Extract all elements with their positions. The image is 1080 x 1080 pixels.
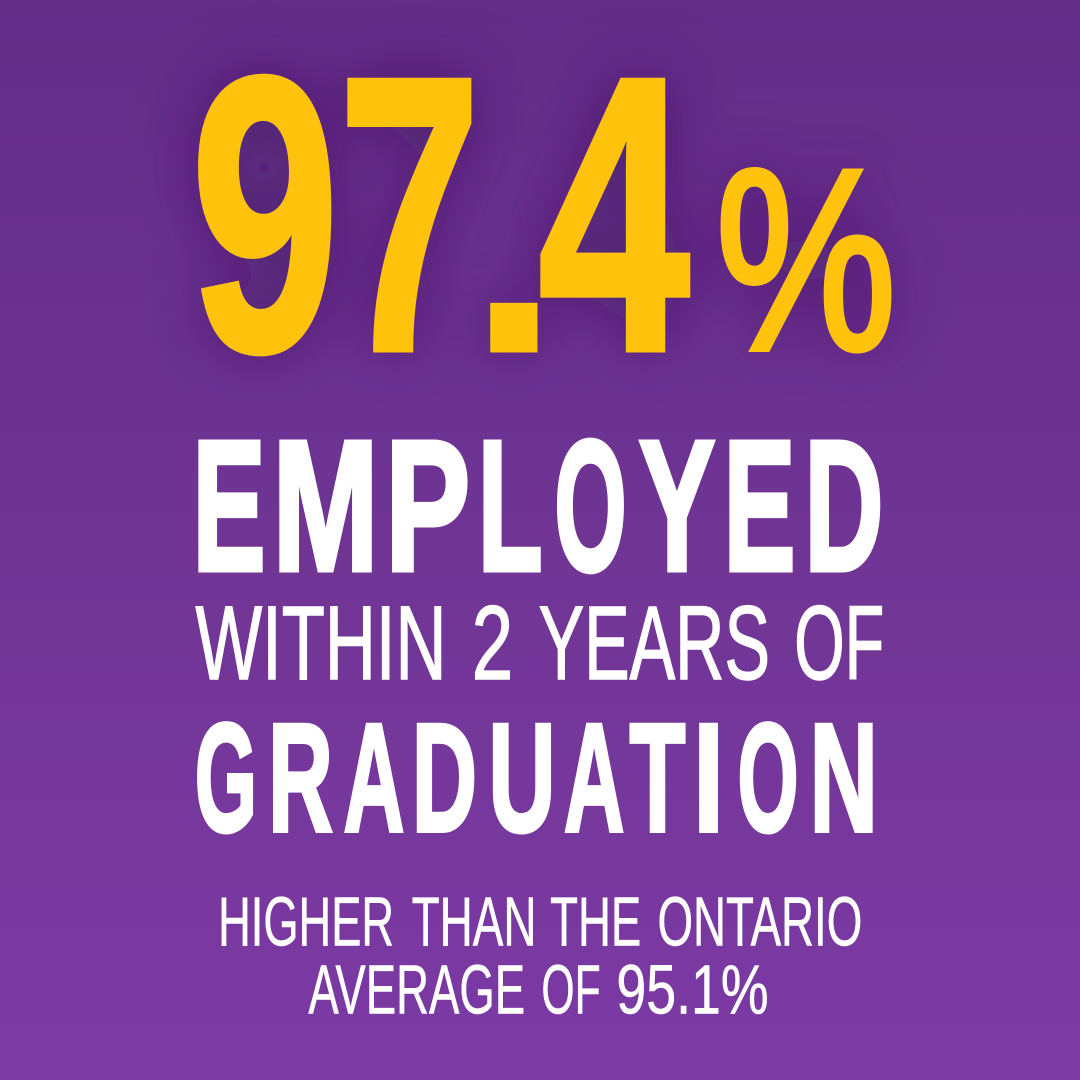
heading: GRADUATION: N	[810, 691, 878, 864]
line 1: ONTARIO	[658, 882, 862, 960]
line 2: AVERAGE	[308, 950, 525, 1028]
heading: GRADUATION: A	[564, 691, 624, 864]
heading: GRADUATION: T	[630, 691, 685, 864]
heading: EMPLOYED: Y	[639, 403, 715, 610]
heading: GRADUATION: G	[195, 691, 257, 864]
line 1: HIGHER	[218, 882, 394, 960]
text: within 2 years of: WITHIN	[196, 585, 446, 702]
number 97.4: 4	[538, 0, 692, 434]
line 2: 95.1%	[616, 950, 769, 1028]
headline statistic: 97.4%	[190, 0, 896, 434]
heading: EMPLOYED: P	[385, 403, 470, 610]
heading: GRADUATION: U	[488, 691, 556, 864]
heading: GRADUATION: O	[738, 691, 798, 864]
text: within 2 years of: OF	[794, 585, 884, 702]
heading: GRADUATION: I	[693, 691, 724, 864]
text: within 2 years of: 2	[472, 585, 513, 702]
heading: EMPLOYED: D	[804, 403, 883, 610]
heading: GRADUATION: D	[412, 691, 477, 864]
line 1: THAN	[412, 882, 536, 960]
number 97.4: 7	[338, 0, 481, 434]
heading: GRADUATION: A	[344, 691, 404, 864]
line 2: OF	[541, 950, 601, 1028]
number 97.4: .	[472, 78, 556, 414]
heading: EMPLOYED: E	[724, 403, 795, 610]
heading: GRADUATION: R	[268, 691, 333, 864]
comparison note	[218, 882, 862, 1028]
heading: EMPLOYED: L	[478, 403, 543, 610]
heading: EMPLOYED: M	[272, 403, 379, 610]
line 1: THE	[550, 882, 641, 960]
heading: EMPLOYED: E	[192, 403, 266, 610]
text: within 2 years of: YEARS	[539, 585, 770, 702]
percent sign: %	[716, 115, 896, 404]
heading: EMPLOYED: O	[554, 403, 627, 610]
number 97.4: 9	[190, 0, 340, 434]
